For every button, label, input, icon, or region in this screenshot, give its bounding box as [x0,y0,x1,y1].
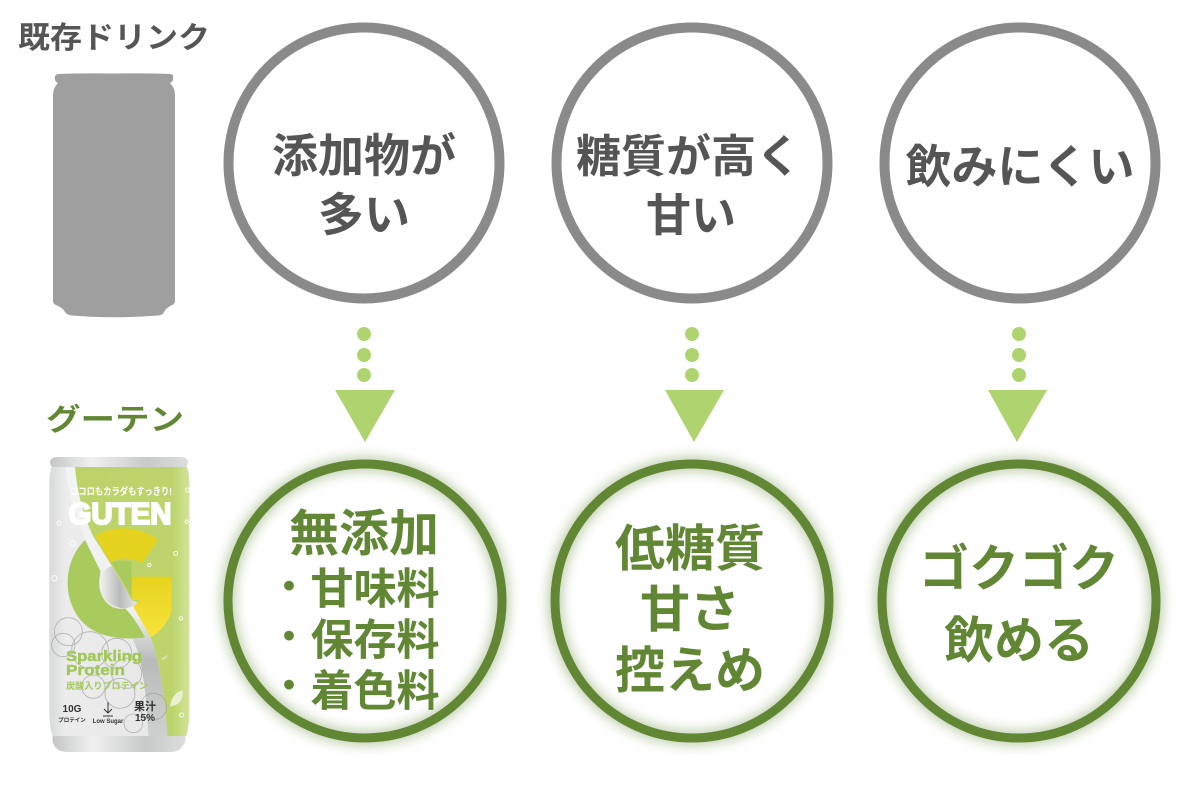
can badges: 15% [135,713,155,724]
G left lime stroke [68,540,145,638]
text: low sugar, mild sweetness: 控えめ [615,643,765,699]
arrow: column 1 [335,327,395,442]
product can: Guten [49,457,189,752]
can tagline: ココロもカラダもすっきり! [70,485,172,498]
result circle: low sugar [555,464,829,738]
text: additive free list: 着色料 [310,668,440,716]
text: low sugar, mild sweetness: 甘さ [640,582,740,638]
circle: hard to drink [884,28,1156,298]
text: many additives: 多い [318,189,410,241]
G logo [68,528,172,638]
can badges: Low Sugar [93,719,124,725]
text: high sugar and sweet: 糖質が高く [576,131,801,182]
result circle: easy to gulp [882,464,1156,738]
can top rim [50,457,188,467]
text: many additives: 添加物が [272,130,456,182]
can brand name: GUTEN [68,496,172,531]
can body [49,467,189,737]
G center silver [100,566,140,608]
can green panel [75,467,189,736]
can badges: プロテイン [58,717,86,724]
text: gulp it down: ゴクゴク [919,541,1119,597]
can product name: Protein [66,662,125,679]
grape illustration [52,618,167,733]
text: additive free list: 甘味料 [310,566,440,614]
arrow: column 2 [665,327,724,442]
circle: additives [228,28,500,298]
can product name: Sparkling [66,648,142,665]
G top yellow stroke [95,528,158,563]
text: additive free list [270,506,440,716]
text: additive free list: ・ [270,666,308,708]
text: hard to drink: 飲みにくい [905,141,1135,193]
text: low sugar, mild sweetness: 低糖質 [615,521,765,577]
text: gulp it down: 飲める [944,613,1094,669]
text: additive free list: ・ [270,567,308,609]
text: additive free list: 保存料 [310,617,440,665]
silver stripe [66,467,167,736]
text: high sugar and sweet: 甘い [646,190,736,241]
can badges: 10G [63,704,82,715]
leaf [170,690,183,707]
G inner lime [112,561,132,597]
heading: Guten: グーテン [46,404,184,437]
bubbles [52,488,189,717]
can subtitle: 炭酸入りプロテイン [66,680,148,691]
heading: existing drink: 既存ドリンク [18,22,210,55]
text: additive free list: ・ [270,617,308,659]
G right yellow stroke [132,577,172,637]
circle: high sugar [556,28,828,298]
can artwork [49,467,189,737]
can badges [58,699,156,725]
text: additive free list: 無添加 [289,506,439,562]
can badges: 果汁 [134,699,156,713]
icon: gray can silhouette [53,73,175,317]
arrow: column 3 [988,327,1047,442]
can lower rim [52,736,185,752]
result circle: additive free [228,464,502,738]
